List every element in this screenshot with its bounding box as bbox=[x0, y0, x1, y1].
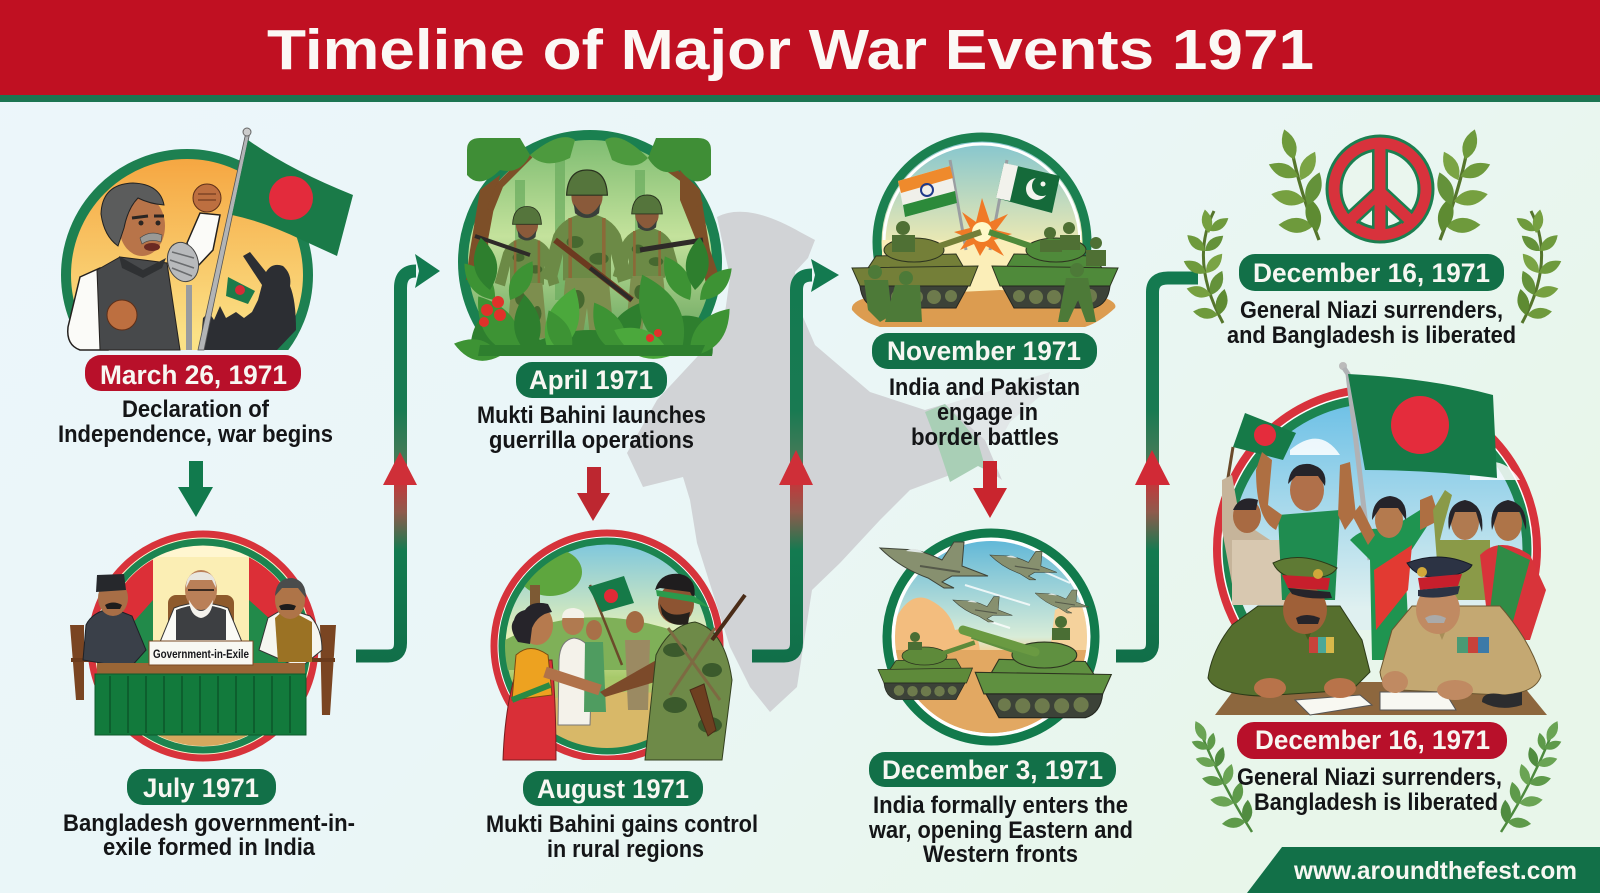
description: rural regions bbox=[486, 811, 758, 863]
footer tag with website: www.aroundthefest.com bbox=[1293, 857, 1577, 885]
title: Timeline of Major War Events 1971 bbox=[267, 18, 1314, 82]
panel: March 26, 1971 bbox=[58, 128, 353, 448]
illustration: speaker with flag bbox=[61, 128, 353, 351]
description: declaration: Independence, war begins bbox=[58, 421, 333, 448]
nameplate: Government-in-Exile bbox=[153, 647, 249, 661]
description: rural regions: Mukti Bahini gains control bbox=[486, 811, 758, 838]
panel: December 3, 1971 bbox=[868, 533, 1133, 868]
description: government in exile: exile formed in India bbox=[103, 834, 316, 861]
date pill: July 1971: July 1971 bbox=[143, 773, 259, 803]
date pill: December 16, 1971 red: December 16, 1971 bbox=[1255, 725, 1490, 755]
description: government in exile bbox=[63, 810, 355, 861]
connector arrow 3 bbox=[1116, 278, 1198, 656]
date pill: July 1971 bbox=[127, 769, 276, 805]
panel: December 16, 1971 surrender bbox=[1173, 362, 1580, 844]
description: border battles: India and Pakistan bbox=[889, 374, 1080, 401]
description: fronts: Western fronts bbox=[923, 841, 1078, 868]
description: border battles bbox=[889, 374, 1080, 451]
description: rural regions: in rural regions bbox=[547, 836, 704, 863]
description: government in exile: Bangladesh government-in- bbox=[63, 810, 355, 837]
panel: August 1971 bbox=[486, 533, 758, 863]
date pill: December 3, 1971: December 3, 1971 bbox=[882, 755, 1103, 785]
footer tag with website bbox=[1247, 847, 1600, 893]
background map: India and Bangladesh bbox=[627, 212, 1050, 712]
arrow: down red bbox=[577, 467, 610, 521]
arrow: down green bbox=[178, 461, 213, 517]
illustration: government-in-exile table bbox=[70, 534, 336, 760]
connector arrow 2 bbox=[752, 259, 839, 656]
connector arrow 1 bbox=[356, 254, 440, 656]
illustration: handshake in village bbox=[494, 533, 745, 760]
officers and table bbox=[1208, 557, 1547, 715]
description: surrender: General Niazi surrenders, bbox=[1237, 764, 1502, 791]
description: surrender bbox=[1237, 764, 1502, 816]
illustration: guerrilla soldiers in jungle bbox=[454, 130, 732, 361]
description: surrender: Bangladesh is liberated bbox=[1254, 789, 1498, 816]
description: fronts: India formally enters the bbox=[873, 792, 1128, 819]
description: surrender and liberation bbox=[1227, 297, 1516, 349]
date pill: November 1971: November 1971 bbox=[887, 336, 1081, 366]
header band bbox=[0, 0, 1600, 102]
date pill: December 16, 1971 green: December 16, 1971 bbox=[1253, 258, 1490, 288]
panel: April 1971 bbox=[451, 135, 740, 454]
description: declaration: Declaration of bbox=[122, 396, 270, 423]
date pill: April 1971: April 1971 bbox=[529, 365, 653, 395]
crowd bbox=[1222, 452, 1546, 660]
illustration: tanks and flags bbox=[852, 137, 1118, 347]
description: guerrilla operations: Mukti Bahini launches bbox=[477, 402, 706, 429]
nameplate bbox=[149, 641, 253, 665]
illustration: jets and tanks bbox=[878, 533, 1111, 741]
arrow: down red bbox=[973, 461, 1007, 518]
laurel branches top inner bbox=[1249, 121, 1510, 251]
panel: December 16, 1971 peace bbox=[1181, 121, 1564, 349]
laurel branches top outer bbox=[1181, 209, 1564, 323]
description: declaration bbox=[58, 396, 333, 448]
illustration: crowd and signing bbox=[1208, 362, 1547, 715]
panel: November 1971 bbox=[852, 137, 1118, 451]
description: guerrilla operations: guerrilla operations bbox=[489, 427, 694, 454]
date pill: March 26, 1971: March 26, 1971 bbox=[100, 360, 287, 390]
description: fronts: war, opening Eastern and bbox=[868, 817, 1133, 844]
icon: peace symbol bbox=[1327, 136, 1433, 242]
description: border battles: engage in bbox=[937, 399, 1038, 426]
panel: July 1971 bbox=[63, 534, 355, 861]
date pill: August 1971: August 1971 bbox=[537, 774, 689, 804]
description: surrender and liberation: and Bangladesh is liberated bbox=[1227, 322, 1516, 349]
description: fronts bbox=[868, 792, 1133, 868]
description: border battles: border battles bbox=[911, 424, 1059, 451]
description: guerrilla operations bbox=[477, 402, 706, 454]
description: surrender and liberation: General Niazi surrenders, bbox=[1240, 297, 1503, 324]
laurel branches bottom bbox=[1173, 714, 1580, 844]
